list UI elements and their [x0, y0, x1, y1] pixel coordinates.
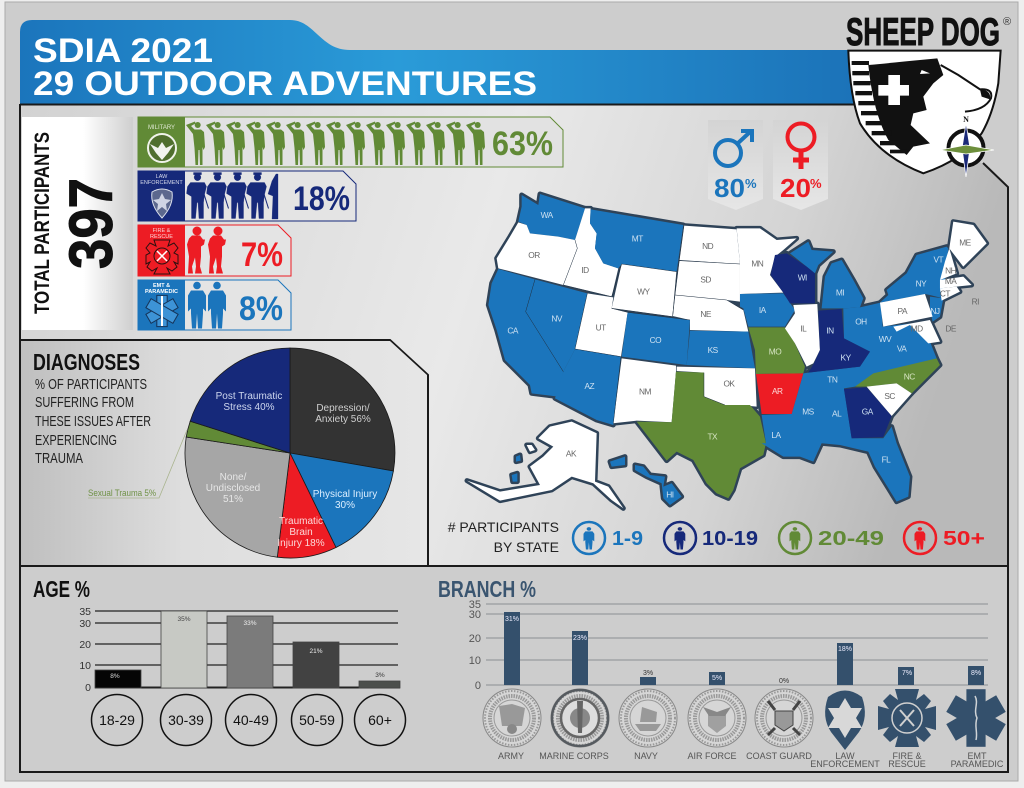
- emblem: marine corps: [551, 689, 609, 747]
- pie labels: Brain: [289, 527, 313, 538]
- branch labels: ENFORCEMENT: [810, 759, 880, 769]
- row: military: [138, 117, 563, 167]
- diagnoses description: THESE ISSUES AFTER: [35, 413, 151, 430]
- map: participants by state: FL: [882, 454, 891, 464]
- emblem: air force: [688, 689, 746, 747]
- map: participants by state: CT: [940, 288, 950, 298]
- map: participants by state: [467, 194, 987, 508]
- map: participants by state: IA: [759, 305, 767, 315]
- map: participants by state: IL: [800, 323, 807, 333]
- pie labels: [206, 391, 377, 549]
- diagnoses description: % OF PARTICIPANTS: [35, 376, 147, 393]
- male percentage tab: [708, 120, 763, 210]
- map: participants by state: ID: [581, 265, 589, 275]
- map: participants by state: TX: [707, 432, 718, 442]
- map: participants by state: MD: [911, 323, 923, 333]
- map: participants by state: LA: [771, 430, 782, 440]
- pie chart: [185, 348, 395, 558]
- map: participants by state: AZ: [584, 381, 595, 391]
- legend: 10-19: [664, 522, 758, 554]
- logo: Sheep Dog: ®: [1003, 16, 1011, 28]
- branch bars: [504, 612, 984, 685]
- panel: age chart: 18-29: [99, 712, 135, 728]
- panel: branch chart: 20: [469, 633, 481, 645]
- map: participants by state: MI: [836, 287, 844, 297]
- panel: age chart: 50-59: [299, 712, 335, 728]
- row: military: MILITARY: [148, 125, 175, 131]
- legend: 50+: 50+: [943, 528, 985, 550]
- map: participants by state: NC: [904, 372, 915, 382]
- map: participants by state: SD: [700, 274, 711, 284]
- map: participants by state: MA: [945, 276, 957, 286]
- emblem: navy: [619, 689, 677, 747]
- branch labels: LAW: [835, 751, 855, 761]
- map: participants by state: WY: [637, 287, 650, 297]
- branch grid and axis: [486, 604, 988, 685]
- panel: age chart: 40-49: [233, 712, 269, 728]
- pie labels: Physical Injury: [313, 489, 377, 500]
- map: participants by state: ME: [959, 237, 972, 247]
- age bar values: [110, 616, 385, 680]
- male percentage tab: %: [745, 176, 757, 191]
- branch bar values: [505, 616, 981, 685]
- legend: 20-49: [779, 522, 884, 554]
- panel: age chart: 30: [79, 618, 91, 630]
- branch labels: PARAMEDIC: [951, 759, 1004, 769]
- map: participants by state: DE: [945, 323, 957, 333]
- panel: age chart: 10: [79, 660, 91, 672]
- age bar values: 21%: [309, 648, 323, 655]
- panel: age chart: 30-39: [168, 712, 204, 728]
- map: participants by state: OH: [855, 317, 867, 327]
- row: EMT and paramedic: EMT &: [153, 283, 170, 289]
- branch labels: [498, 751, 1004, 769]
- branch bar values: 5%: [712, 675, 722, 682]
- branch bar values: 0%: [779, 678, 789, 685]
- panel: branch chart: [438, 576, 1006, 769]
- compass: N: [963, 115, 969, 124]
- panel: age chart: 20: [79, 639, 91, 651]
- branch bar values: 31%: [505, 616, 519, 623]
- diagnoses description: SUFFERING FROM: [35, 394, 134, 411]
- legend: 20-49: 20-49: [818, 528, 884, 550]
- map: participants by state: OR: [528, 250, 540, 260]
- emblem: fire and rescue: [878, 689, 936, 747]
- branch labels: NAVY: [634, 751, 658, 761]
- map: participants by state: CO: [650, 335, 662, 345]
- row: law enforcement: ENFORCEMENT: [140, 180, 183, 186]
- map: participants by state: NM: [639, 387, 652, 397]
- emblem: army: [483, 689, 541, 747]
- emblem: law enforcement: [825, 690, 865, 750]
- map: participants by state: OK: [723, 378, 735, 388]
- panel: branch chart: 35: [469, 599, 481, 611]
- panel: total participants: [22, 117, 133, 330]
- map: participants by state: VA: [897, 343, 907, 353]
- map: participants by state: NJ: [930, 306, 940, 316]
- branch labels: ARMY: [498, 751, 524, 761]
- row: fire and rescue: 7%: [241, 236, 283, 274]
- legend: 1-9: [573, 522, 643, 554]
- female percentage tab: %: [810, 176, 822, 191]
- map: participants by state: WA: [541, 210, 554, 220]
- map: participants by state: RI: [972, 297, 979, 307]
- map: participants by state: PA: [898, 306, 908, 316]
- shield: [848, 51, 1001, 173]
- map: participants by state: CA: [507, 326, 519, 336]
- branch bar values: 23%: [573, 635, 587, 642]
- header banner: [20, 20, 860, 104]
- panel: age chart: 35: [79, 606, 91, 618]
- branch labels: MARINE CORPS: [539, 751, 609, 761]
- panel: upper content area: [20, 104, 1008, 566]
- map: participants by state: AK: [566, 448, 577, 458]
- sexual trauma callout: [88, 430, 187, 499]
- map: participants by state: IN: [826, 326, 834, 336]
- pie labels: Anxiety 56%: [315, 414, 371, 425]
- branch bar values: 3%: [643, 670, 653, 677]
- map: participants by state: KS: [708, 345, 719, 355]
- compass: [940, 115, 994, 177]
- pie labels: 30%: [335, 500, 355, 511]
- male percentage tab: 80: [714, 173, 745, 203]
- branch labels: AIR FORCE: [687, 751, 737, 761]
- map: participants by state: SC: [884, 391, 895, 401]
- age bar values: 8%: [110, 673, 120, 680]
- branch labels: RESCUE: [888, 759, 926, 769]
- pie labels: 51%: [223, 494, 243, 505]
- pie labels: Stress 40%: [223, 402, 275, 413]
- panel: age chart: 60+: [368, 712, 392, 728]
- map: participants by state: ND: [702, 241, 714, 251]
- map legend: BY STATE: [494, 539, 559, 555]
- branch bar values: 7%: [902, 670, 912, 677]
- age grid and axis: [95, 611, 400, 688]
- map: participants by state: NY: [916, 278, 927, 288]
- legend: 50+: [904, 522, 985, 554]
- row: fire and rescue: [138, 225, 291, 276]
- age bar values: 3%: [375, 672, 385, 679]
- row: fire and rescue: FIRE &: [153, 228, 171, 234]
- pie labels: Traumatic: [279, 516, 323, 527]
- age groups: [92, 694, 406, 746]
- map: participants by state: AL: [832, 408, 842, 418]
- row: law enforcement: [138, 171, 356, 221]
- map: participants by state: GA: [862, 407, 874, 417]
- diagnoses description: EXPERIENCING: [35, 432, 117, 449]
- legend: 1-9: 1-9: [612, 528, 643, 550]
- map: participants by state: HI: [666, 489, 674, 499]
- map: participants by state: KY: [841, 352, 852, 362]
- panel: age chart: 0: [85, 682, 91, 694]
- title: SDIA 2021: [33, 32, 213, 70]
- panel: age chart: [33, 576, 406, 746]
- logo: Sheep Dog: [846, 11, 1011, 177]
- female percentage tab: [773, 120, 828, 210]
- branch labels: FIRE &: [892, 751, 922, 761]
- branch labels: EMT: [968, 751, 987, 761]
- branch heading: BRANCH %: [438, 576, 536, 602]
- row: law enforcement: LAW: [156, 174, 168, 180]
- total participants label: TOTAL PARTICIPANTS: [31, 132, 54, 314]
- emblem: EMT paramedic: [946, 689, 1006, 747]
- pie labels: Undisclosed: [206, 483, 260, 494]
- map: participants by state: TN: [827, 374, 838, 384]
- diagnoses heading: DIAGNOSES: [33, 349, 140, 375]
- panel: branch chart: 0: [475, 680, 481, 692]
- panel: diagnoses: [21, 341, 427, 565]
- age bar values: 35%: [177, 616, 191, 623]
- panel: bottom charts area: [20, 567, 1008, 772]
- age heading: AGE %: [33, 576, 90, 602]
- map legend: # PARTICIPANTS: [448, 519, 559, 535]
- branch labels: COAST GUARD: [746, 751, 812, 761]
- map: participants by state: MO: [769, 347, 782, 357]
- map: participants by state: WI: [798, 273, 807, 283]
- row: military: 63%: [492, 125, 553, 163]
- pie labels: Depression/: [316, 403, 370, 414]
- total count: 397: [57, 178, 125, 269]
- branch bar values: 18%: [838, 646, 852, 653]
- row: fire and rescue: RESCUE: [150, 234, 173, 240]
- map: participants by state: MS: [802, 407, 815, 417]
- map legend: [448, 519, 985, 555]
- icon: male symbol: [715, 131, 752, 166]
- map: participants by state: NH: [945, 266, 957, 276]
- row: law enforcement: 18%: [293, 180, 350, 218]
- panel: branch chart: 10: [469, 655, 481, 667]
- row: EMT and paramedic: PARAMEDIC: [145, 289, 178, 295]
- title: 29 OUTDOOR ADVENTURES: [33, 65, 537, 103]
- branch bar values: 8%: [971, 670, 981, 677]
- panel: branch chart: 30: [469, 609, 481, 621]
- emblem: coast guard: [755, 689, 813, 747]
- age bar values: 33%: [243, 620, 257, 627]
- sexual trauma callout: Sexual Trauma 5%: [88, 488, 156, 499]
- map: participants by state: MT: [632, 233, 643, 243]
- pie labels: Injury 18%: [277, 538, 325, 549]
- age bars: [95, 611, 400, 688]
- map: participants by state: MN: [751, 258, 764, 268]
- icon: female symbol: [788, 124, 814, 169]
- pie labels: None/: [220, 472, 247, 483]
- diagnoses description: TRAUMA: [35, 450, 83, 467]
- map: participants by state: UT: [596, 323, 606, 333]
- map: participants by state: NV: [551, 313, 563, 323]
- map: participants by state: WV: [879, 334, 892, 344]
- map: participants by state: AR: [772, 386, 783, 396]
- pie labels: Post Traumatic: [216, 391, 282, 402]
- map: participants by state: NE: [700, 309, 712, 319]
- female percentage tab: 20: [780, 173, 811, 203]
- map: participants by state: VT: [933, 254, 944, 264]
- row: EMT and paramedic: 8%: [239, 290, 283, 328]
- legend: 10-19: 10-19: [702, 528, 758, 550]
- row: EMT and paramedic: [138, 280, 291, 330]
